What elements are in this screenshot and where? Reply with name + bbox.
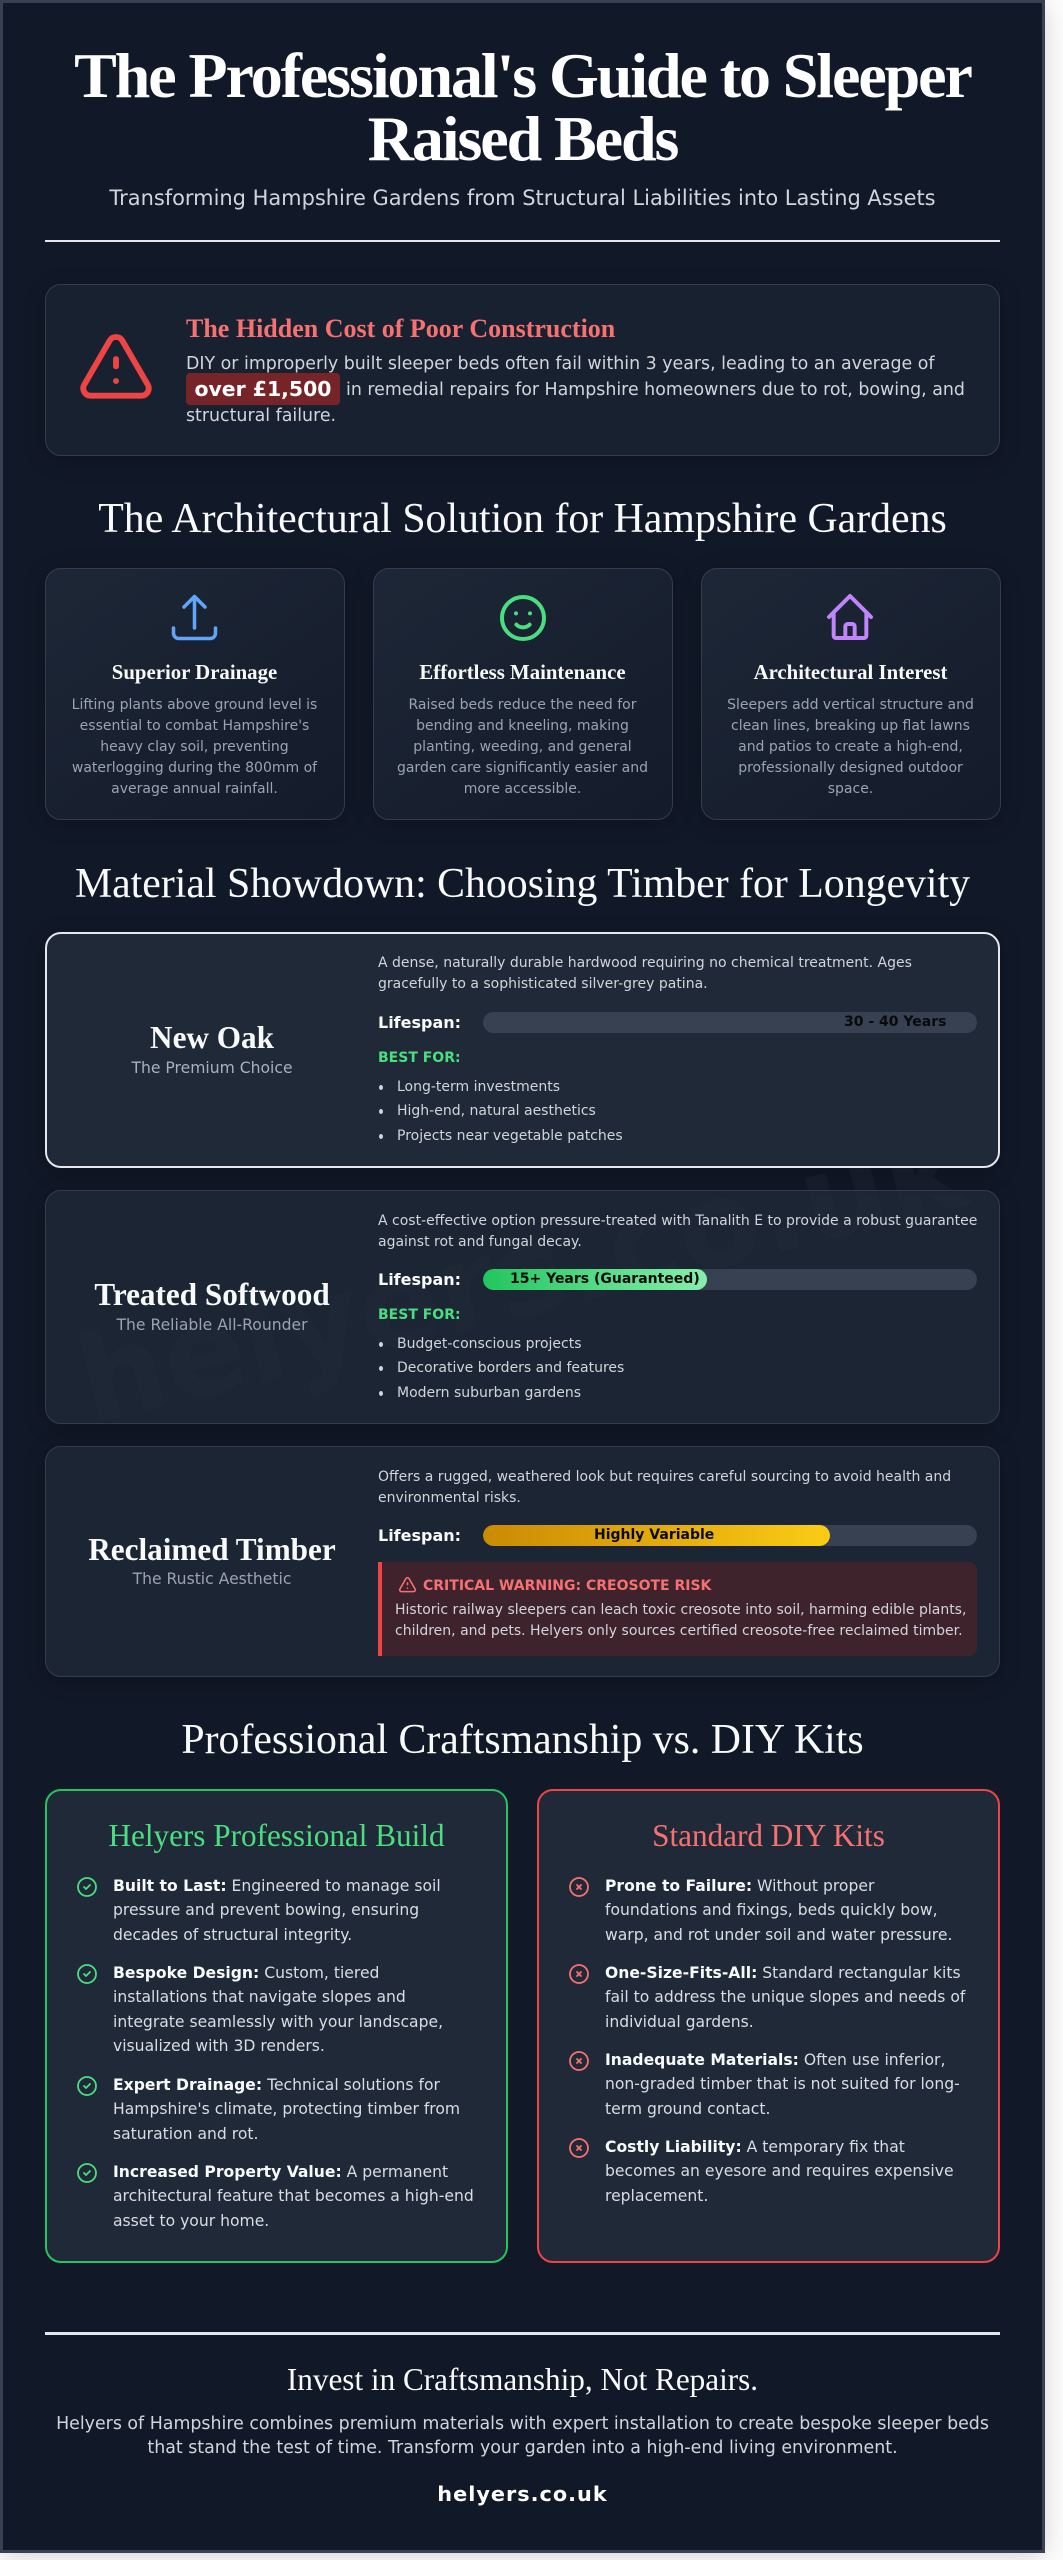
card heading: effortless maintenance: Effortless Maintenance	[419, 661, 626, 684]
new oak lifespan label: Lifespan:	[378, 1013, 461, 1032]
footer text: that stand the test of time. Transform your garden into a high-end living environment.	[147, 2438, 898, 2458]
item text: foundations and fixings, beds quickly bow,	[605, 1901, 938, 1919]
card text: superior drainage: Lifting plants above ground level is	[72, 696, 317, 712]
reclaimed timber description: environmental risks.	[378, 1490, 521, 1506]
reclaimed timber subtitle: The Rustic Aesthetic	[133, 1570, 291, 1588]
treated softwood lifespan bar	[483, 1269, 977, 1290]
pro item 1	[77, 1877, 441, 1944]
reclaimed timber description: Offers a rugged, weathered look but requires careful sourcing to avoid health and	[378, 1469, 951, 1485]
item text: Prone to Failure: Without proper	[605, 1877, 874, 1895]
diy item 4	[569, 2138, 954, 2205]
diy item 2	[569, 1964, 966, 2031]
icon: warning triangle	[80, 334, 152, 399]
callout: creosote warning	[378, 1562, 977, 1656]
card text: superior drainage: heavy clay soil, preventing	[100, 738, 289, 754]
icon: cross	[569, 1964, 589, 1984]
item text	[113, 2076, 460, 2143]
pro item 3	[77, 2076, 460, 2143]
card text: effortless maintenance	[397, 696, 648, 796]
footer link: helyers.co.uk	[437, 2482, 608, 2506]
new oak best for: BEST FOR:	[378, 1050, 461, 1066]
item text: architectural feature that becomes a high-end	[113, 2187, 474, 2205]
title	[74, 40, 972, 174]
alert text: structural failure.	[186, 406, 336, 426]
item text: pressure and prevent bowing, ensuring	[113, 1901, 419, 1919]
new oak description: gracefully to a sophisticated silver-grey patina.	[378, 976, 708, 992]
treated softwood lifespan label: Lifespan:	[378, 1270, 461, 1289]
panel: reclaimed timber	[45, 1446, 1000, 1677]
new oak subtitle: The Premium Choice	[131, 1059, 293, 1077]
item text: replacement.	[605, 2187, 708, 2205]
panel: standard diy kits	[537, 1789, 1000, 2263]
icon: house	[826, 594, 874, 640]
title: The Professional's Guide to Sleeper	[74, 40, 971, 111]
icon: check	[77, 2076, 97, 2096]
item text	[113, 1964, 443, 2055]
panel: new oak	[45, 932, 1000, 1168]
item text	[605, 1964, 966, 2031]
icon: cross	[569, 2051, 589, 2071]
card text: superior drainage: waterlogging during the 800mm of	[72, 760, 317, 776]
alert heading: The Hidden Cost of Poor Construction	[186, 314, 615, 343]
footer text	[45, 2412, 1000, 2461]
treated softwood list	[379, 1336, 624, 1401]
heading: architectural solution: The Architectural Solution for Hampshire Gardens	[98, 496, 947, 542]
item text: warp, and rot under soil and water pressure.	[605, 1926, 952, 1944]
new oak title: New Oak	[150, 1020, 274, 1055]
new oak list: Long-term investments	[397, 1079, 560, 1095]
item text: visualized with 3D renders.	[113, 2037, 325, 2055]
item text: Hampshire's climate, protecting timber from	[113, 2100, 460, 2118]
reclaimed timber lifespan bar	[483, 1525, 977, 1546]
card text: architectural interest	[727, 696, 974, 796]
card text: architectural interest: and patios to create a high-end,	[738, 738, 963, 754]
treated softwood list: Budget-conscious projects	[397, 1336, 582, 1352]
warning text	[395, 1602, 966, 1639]
item text: Built to Last: Engineered to manage soil	[113, 1877, 441, 1895]
card text: architectural interest: Sleepers add vertical structure and	[727, 696, 974, 712]
treated softwood list: Decorative borders and features	[397, 1360, 624, 1376]
alert text: over £1,500	[194, 377, 331, 401]
item text: Bespoke Design: Custom, tiered	[113, 1964, 379, 1982]
treated softwood description: A cost-effective option pressure-treated with Tanalith E to provide a robust guarantee	[378, 1213, 977, 1229]
item text: non-graded timber that is not suited for long-	[605, 2075, 960, 2093]
card text: effortless maintenance: bending and kneeling, making	[416, 718, 629, 734]
item text: term ground contact.	[605, 2100, 770, 2118]
subtitle: Transforming Hampshire Gardens from Structural Liabilities into Lasting Assets	[109, 186, 936, 210]
panel: superior drainage	[45, 568, 344, 820]
card text: superior drainage	[72, 696, 318, 796]
panel heading: helyers: Helyers Professional Build	[108, 1818, 445, 1853]
treated softwood lifespan bar: 15+ Years (Guaranteed)	[510, 1271, 700, 1287]
new oak lifespan bar	[483, 1012, 977, 1033]
heading: craftsmanship vs kits: Professional Craftsmanship vs. DIY Kits	[181, 1717, 864, 1763]
icon: cross	[569, 2138, 589, 2158]
panel: treated softwood	[45, 1190, 1000, 1424]
item text	[113, 1877, 441, 1944]
new oak description: A dense, naturally durable hardwood requiring no chemical treatment. Ages	[378, 955, 912, 971]
item text: decades of structural integrity.	[113, 1926, 352, 1944]
heading: material showdown: Material Showdown: Choosing Timber for Longevity	[75, 861, 970, 907]
item text	[605, 2051, 960, 2118]
card text: effortless maintenance: planting, weeding, and general	[413, 738, 632, 754]
icon: check	[77, 2163, 97, 2183]
alert text: DIY or improperly built sleeper beds often fail within 3 years, leading to an average of	[186, 354, 934, 374]
item text: fail to address the unique slopes and needs of	[605, 1988, 965, 2006]
pro item 2	[77, 1964, 443, 2055]
reclaimed timber title: Reclaimed Timber	[88, 1532, 336, 1567]
treated softwood subtitle: The Reliable All-Rounder	[116, 1316, 308, 1334]
pro item 4	[77, 2163, 474, 2230]
panel: helyers professional build	[45, 1789, 508, 2263]
icon: smiley	[500, 595, 546, 641]
card text: effortless maintenance: more accessible.	[464, 780, 581, 796]
card text: architectural interest: clean lines, breaking up flat lawns	[731, 718, 970, 734]
treated softwood description: against rot and fungal decay.	[378, 1234, 582, 1250]
item text	[605, 1877, 952, 1944]
treated softwood best for: BEST FOR:	[378, 1307, 461, 1323]
new oak description	[378, 955, 912, 992]
icon: cross	[569, 1877, 589, 1897]
card heading: superior drainage: Superior Drainage	[112, 661, 277, 684]
watermark: helyers.co.uk	[64, 1097, 979, 1452]
warning text: children, and pets. Helyers only sources certified creosote-free reclaimed timber.	[395, 1623, 963, 1639]
card text: superior drainage: average annual rainfall.	[111, 780, 278, 796]
diy item 3	[569, 2051, 960, 2118]
item text: individual gardens.	[605, 2013, 754, 2031]
item text: becomes an eyesore and requires expensive	[605, 2162, 954, 2180]
panel heading: diy: Standard DIY Kits	[652, 1818, 885, 1853]
title: Raised Beds	[368, 103, 677, 174]
card text: superior drainage: essential to combat Hampshire's	[80, 718, 309, 734]
reclaimed timber lifespan label: Lifespan:	[378, 1526, 461, 1545]
card text: effortless maintenance: garden care significantly easier and	[397, 760, 648, 776]
reclaimed timber lifespan bar: Highly Variable	[594, 1527, 714, 1543]
new oak list: High-end, natural aesthetics	[397, 1103, 596, 1119]
icon: check	[77, 1877, 97, 1897]
item text: integrate seamlessly with your landscape,	[113, 2013, 443, 2031]
treated softwood list: Modern suburban gardens	[397, 1385, 581, 1401]
reclaimed timber description	[378, 1469, 951, 1506]
item text: Costly Liability: A temporary fix that	[605, 2138, 905, 2156]
panel: architectural interest	[701, 568, 1000, 820]
footer text: Helyers of Hampshire combines premium materials with expert installation to create bespoke sleeper beds	[56, 2414, 989, 2434]
icon: upload arrow	[172, 594, 218, 640]
item text: One-Size-Fits-All: Standard rectangular kits	[605, 1964, 961, 1982]
card text: architectural interest: professionally designed outdoor	[738, 760, 963, 776]
card text: effortless maintenance: Raised beds reduce the need for	[409, 696, 636, 712]
item text: Increased Property Value: A permanent	[113, 2163, 448, 2181]
treated softwood title: Treated Softwood	[94, 1277, 330, 1312]
card text: architectural interest: space.	[828, 780, 873, 796]
item text: installations that navigate slopes and	[113, 1988, 406, 2006]
treated softwood description	[378, 1213, 977, 1250]
panel: hidden cost alert	[45, 284, 1000, 456]
item text: asset to your home.	[113, 2212, 269, 2230]
item text: Expert Drainage: Technical solutions for	[113, 2076, 440, 2094]
item text	[113, 2163, 474, 2230]
icon: check	[77, 1964, 97, 1984]
new oak list: Projects near vegetable patches	[397, 1128, 623, 1144]
item text: saturation and rot.	[113, 2125, 258, 2143]
warning text: Historic railway sleepers can leach toxic creosote into soil, harming edible plants,	[395, 1602, 966, 1618]
footer heading: Invest in Craftsmanship, Not Repairs.	[287, 2362, 758, 2397]
item text	[605, 2138, 954, 2205]
new oak list	[379, 1079, 623, 1144]
icon: small warning	[398, 1576, 416, 1592]
card heading: architectural interest: Architectural Interest	[754, 661, 947, 684]
new oak lifespan bar: 30 - 40 Years	[844, 1014, 946, 1030]
alert text	[186, 354, 965, 426]
warning heading: CRITICAL WARNING: CREOSOTE RISK	[423, 1578, 711, 1594]
alert text: in remedial repairs for Hampshire homeowners due to rot, bowing, and	[346, 380, 965, 400]
diy item 1	[569, 1877, 952, 1944]
item text: Inadequate Materials: Often use inferior,	[605, 2051, 945, 2069]
panel: effortless maintenance	[373, 568, 672, 820]
